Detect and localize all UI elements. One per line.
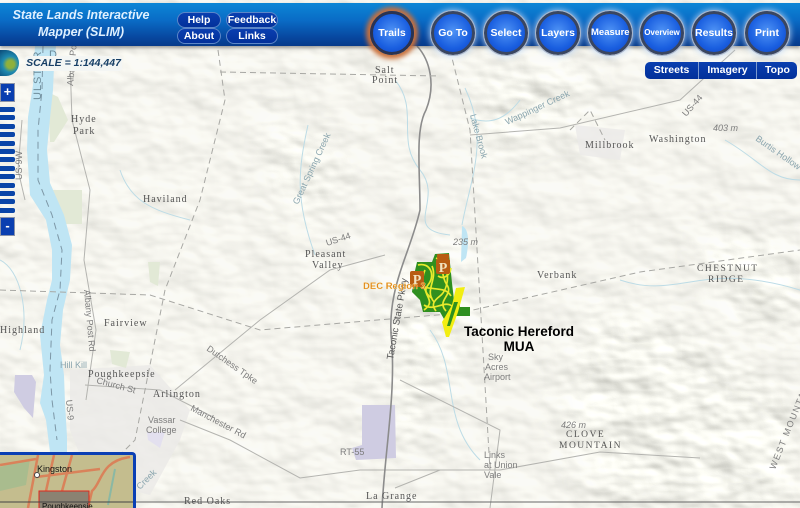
- label: DEC Region 3: DEC Region 3: [363, 281, 426, 292]
- button: Results: [692, 11, 736, 55]
- topographic base map: Taconic State Pkwy: [385, 277, 410, 361]
- map labels: MOUNTAIN: [559, 441, 622, 451]
- topographic base map: Albany Post Rd: [82, 289, 97, 352]
- topographic base map: at Union: [484, 460, 518, 470]
- parking markers: [410, 254, 450, 288]
- topographic base map: Lake Brook: [468, 113, 490, 160]
- overview inset map: Kingston: [37, 464, 72, 474]
- topographic base map: Albany Post Rd: [65, 23, 80, 86]
- topographic base map: College: [146, 425, 177, 435]
- extent box: [39, 491, 89, 508]
- topographic base map: US-9: [64, 399, 76, 421]
- Taconic Hereford MUA parcels: [410, 253, 470, 337]
- basemap switcher: Imagery: [707, 64, 748, 76]
- button: Go To: Go To: [438, 27, 468, 39]
- button: Print: Print: [755, 27, 779, 39]
- help buttons: Help: [188, 14, 210, 26]
- topographic base map: ULSTER: [32, 51, 44, 100]
- title: State Lands Interactive: [13, 8, 149, 22]
- basemap switcher: Streets: [654, 64, 689, 76]
- topographic base map: 426 m: [561, 420, 587, 430]
- topographic base map: US-44: [680, 93, 705, 118]
- map labels: Washington: [649, 134, 707, 145]
- map labels: Park: [73, 126, 95, 137]
- button: Layers: [536, 11, 580, 55]
- map labels: Pleasant: [305, 249, 346, 260]
- topographic base map: Vassar: [148, 415, 175, 425]
- lake: [461, 226, 468, 262]
- title: [12, 8, 150, 39]
- zoom slider: [0, 83, 15, 236]
- button: Overview: [640, 11, 684, 55]
- label: Taconic Hereford MUA: [464, 324, 574, 354]
- button: Trails: Trails: [378, 27, 406, 39]
- topographic base map: US-44: [325, 231, 352, 248]
- button: Overview: Overview: [644, 28, 680, 37]
- help buttons: Feedback: [228, 14, 276, 26]
- topographic base map: Creek: [134, 467, 159, 491]
- parking markers: P: [413, 273, 422, 288]
- map labels: CLOVE: [566, 430, 605, 440]
- button: Measure: [588, 11, 632, 55]
- map labels: Salt: [375, 65, 395, 76]
- Taconic State Parkway: [382, 46, 431, 508]
- topographic base map: Church St: [95, 375, 137, 395]
- map labels: RIDGE: [708, 275, 745, 285]
- map labels: Highland: [0, 325, 45, 336]
- button: Select: Select: [491, 27, 521, 39]
- map labels: Poughkeepsie: [88, 369, 156, 380]
- header bar: [0, 3, 800, 46]
- map labels: Point: [372, 75, 398, 86]
- button: Go To: [431, 11, 475, 55]
- purple parcels: [14, 375, 36, 418]
- help buttons: About: [184, 30, 214, 42]
- river centerline: [38, 46, 62, 440]
- topographic base map: Hill Kill: [60, 360, 87, 370]
- topographic base map: Links: [484, 450, 506, 460]
- parking markers: P: [439, 261, 448, 276]
- globe icon: [0, 50, 19, 76]
- map labels: Arlington: [153, 389, 201, 400]
- help buttons: Links: [238, 30, 266, 42]
- button: Measure: Measure: [591, 27, 630, 38]
- scale label: SCALE = 1:144,447: [26, 57, 121, 69]
- button: Trails: [370, 11, 414, 55]
- overview inset map: [0, 452, 136, 508]
- label: Taconic Hereford MUA: MUA: [504, 339, 535, 354]
- map labels: Fairview: [104, 318, 148, 329]
- map labels: Red Oaks: [184, 496, 231, 507]
- map labels: Verbank: [537, 270, 577, 281]
- title: Mapper (SLIM): [38, 25, 124, 39]
- topographic base map: Acres: [485, 362, 509, 372]
- button: Print: [745, 11, 789, 55]
- topographic base map: Wappinger Creek: [504, 88, 571, 127]
- topographic base map: D: [49, 49, 57, 61]
- button: Layers: Layers: [541, 27, 575, 39]
- zoom slider: -: [5, 218, 10, 233]
- topographic base map: Dutchess Tpke: [205, 343, 260, 386]
- Hudson River: [27, 46, 72, 452]
- topographic base map: Manchester Rd: [189, 403, 248, 440]
- topographic base map: Airport: [484, 372, 511, 382]
- button: Results: Results: [695, 27, 733, 39]
- topographic base map: Sky: [488, 352, 504, 362]
- topographic base map: 235 m: [452, 237, 479, 247]
- map labels: Hyde: [71, 114, 97, 125]
- streams: [0, 80, 800, 460]
- zoom slider: +: [4, 84, 11, 99]
- label: Taconic Hereford MUA: Taconic Hereford: [464, 324, 574, 339]
- topographic base map: RT-55: [340, 447, 364, 457]
- basemap switcher: Topo: [765, 64, 790, 76]
- map labels: CHESTNUT: [697, 264, 759, 274]
- topographic base map: 403 m: [713, 123, 739, 133]
- help buttons: [177, 12, 278, 44]
- parks: [48, 92, 160, 368]
- basemap switcher: [645, 62, 797, 79]
- map labels: Millbrook: [585, 140, 635, 151]
- urban area: [70, 365, 190, 495]
- map labels: La Grange: [366, 491, 417, 502]
- button: Select: [484, 11, 528, 55]
- topographic base map: Great Spring Creek: [291, 131, 333, 206]
- map labels: Haviland: [143, 194, 188, 205]
- topographic base map: US-9W: [14, 150, 24, 180]
- topographic base map: Vale: [484, 470, 501, 480]
- map labels: Valley: [312, 260, 344, 271]
